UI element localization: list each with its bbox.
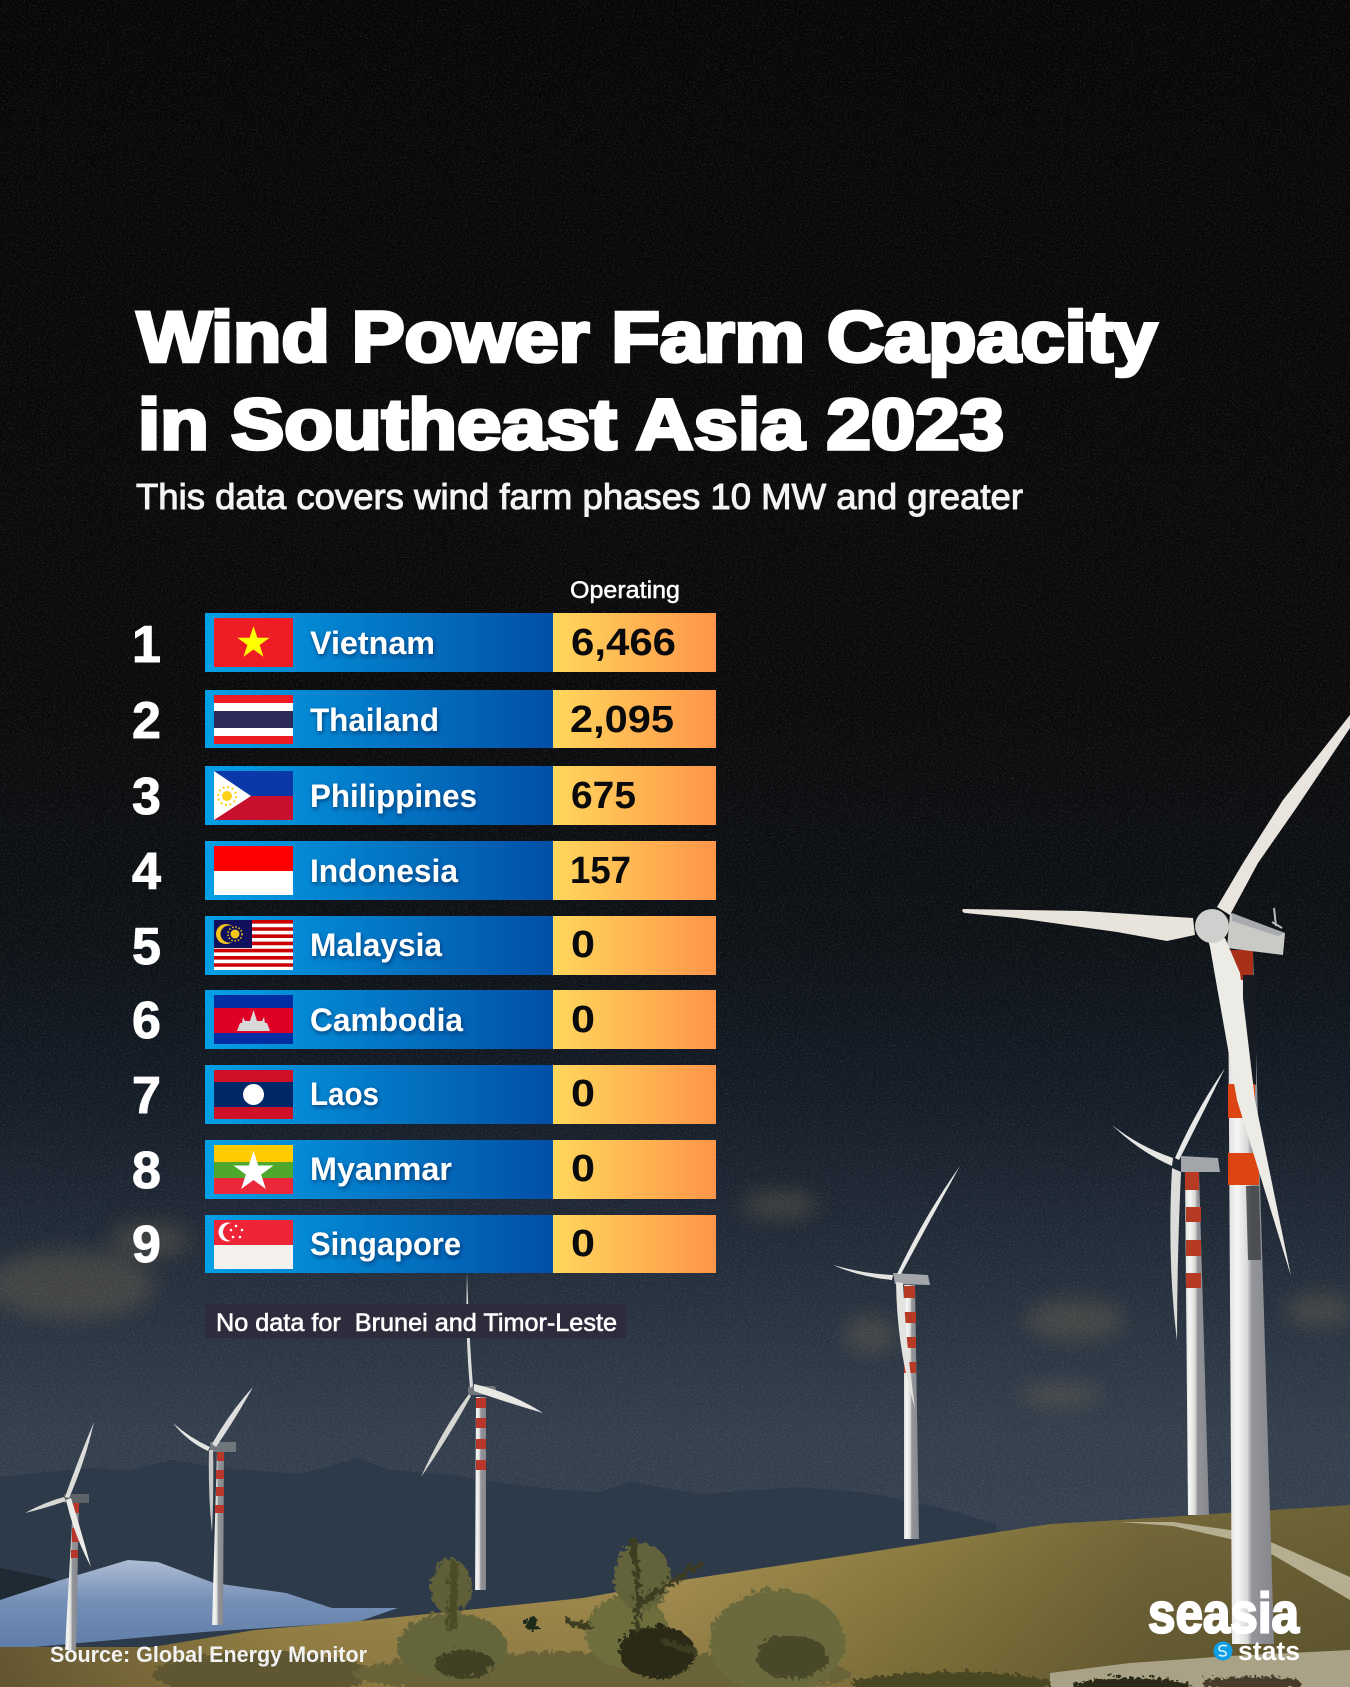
bushes in the foreground	[150, 1535, 1300, 1687]
row 6: Cambodia	[132, 990, 716, 1050]
row 3: Philippines	[132, 766, 716, 826]
title	[137, 298, 1158, 465]
row 3: Philippines: Philippines	[310, 778, 477, 814]
row 8: Myanmar	[132, 1140, 716, 1200]
row 1: Vietnam	[132, 613, 716, 674]
row 8: Myanmar: Myanmar	[310, 1151, 452, 1187]
row 6: Cambodia: Cambodia	[310, 1002, 463, 1038]
title: Wind Power Farm Capacity	[137, 298, 1158, 378]
row 7: Laos: Laos	[310, 1076, 379, 1112]
background: dark foothill	[0, 1568, 70, 1610]
row 4: Indonesia: 157	[570, 850, 631, 892]
flag: Vietnam	[214, 618, 293, 667]
flag: Indonesia	[214, 846, 293, 895]
title: in Southeast Asia 2023	[138, 386, 1004, 465]
lower road	[1050, 1650, 1350, 1687]
column header: Operating: Operating	[570, 577, 680, 604]
row 9: Singapore	[132, 1215, 716, 1274]
subtitle: This data covers wind farm phases 10 MW and greater	[136, 476, 1023, 517]
logo mark	[1214, 1642, 1232, 1660]
row 3: Philippines: 3	[132, 768, 161, 826]
row 1: Vietnam: 1	[132, 616, 161, 674]
turbine: centre left	[421, 1273, 543, 1590]
turbine: back left	[25, 1422, 94, 1650]
flag: Laos	[214, 1070, 293, 1119]
row 2: Thailand: 2	[132, 692, 161, 750]
logo: seasia stats: seasia	[1148, 1583, 1299, 1645]
turbine: right back	[1112, 1068, 1225, 1515]
turbine: middle	[833, 1166, 960, 1539]
row 2: Thailand: Thailand	[310, 702, 439, 738]
row 5: Malaysia: 0	[571, 924, 595, 966]
turbine: large foreground	[962, 715, 1350, 1644]
background: snowy mountain	[0, 1560, 398, 1650]
row 5: Malaysia	[132, 916, 716, 976]
row 3: Philippines: 675	[571, 775, 636, 817]
logo: seasia stats: stats	[1238, 1636, 1300, 1666]
row 7: Laos	[132, 1065, 716, 1125]
row 1: Vietnam: 6,466	[571, 622, 676, 664]
row 6: Cambodia: 6	[132, 992, 161, 1050]
flag: Thailand	[214, 695, 293, 744]
row 1: Vietnam: Vietnam	[310, 625, 435, 661]
row 5: Malaysia: 5	[132, 918, 161, 976]
row 9: Singapore: 9	[132, 1216, 161, 1274]
row 8: Myanmar: 8	[132, 1142, 161, 1200]
background: hill shading	[0, 1505, 1350, 1687]
row 6: Cambodia: 0	[571, 999, 595, 1041]
turbine: second from left	[173, 1387, 253, 1625]
row 5: Malaysia: Malaysia	[310, 927, 442, 963]
row 7: Laos: 0	[571, 1073, 595, 1115]
note: no data: No data for Brunei and Timor-Leste	[216, 1309, 617, 1337]
row 2: Thailand: 2,095	[570, 699, 674, 741]
row 2: Thailand	[132, 690, 716, 750]
background: clouds	[0, 1191, 1350, 1407]
background: grassy hill	[0, 1505, 1350, 1687]
row 7: Laos: 7	[132, 1067, 161, 1125]
source: Source: Global Energy Monitor	[50, 1642, 367, 1667]
road on the hill	[1120, 1522, 1350, 1600]
flag: Philippines	[214, 771, 293, 820]
flag: Myanmar	[214, 1145, 293, 1194]
row 9: Singapore: 0	[571, 1223, 595, 1265]
row 4: Indonesia: 4	[132, 843, 161, 901]
flag: Singapore	[214, 1220, 293, 1269]
row 4: Indonesia: Indonesia	[310, 853, 458, 889]
row 4: Indonesia	[132, 841, 716, 901]
background: distant mountains	[0, 1458, 1010, 1650]
row 9: Singapore: Singapore	[310, 1226, 461, 1262]
row 8: Myanmar: 0	[571, 1148, 595, 1190]
flag: Cambodia	[214, 995, 293, 1044]
flag: Malaysia	[214, 920, 293, 970]
mast on the nacelle	[1272, 908, 1282, 928]
